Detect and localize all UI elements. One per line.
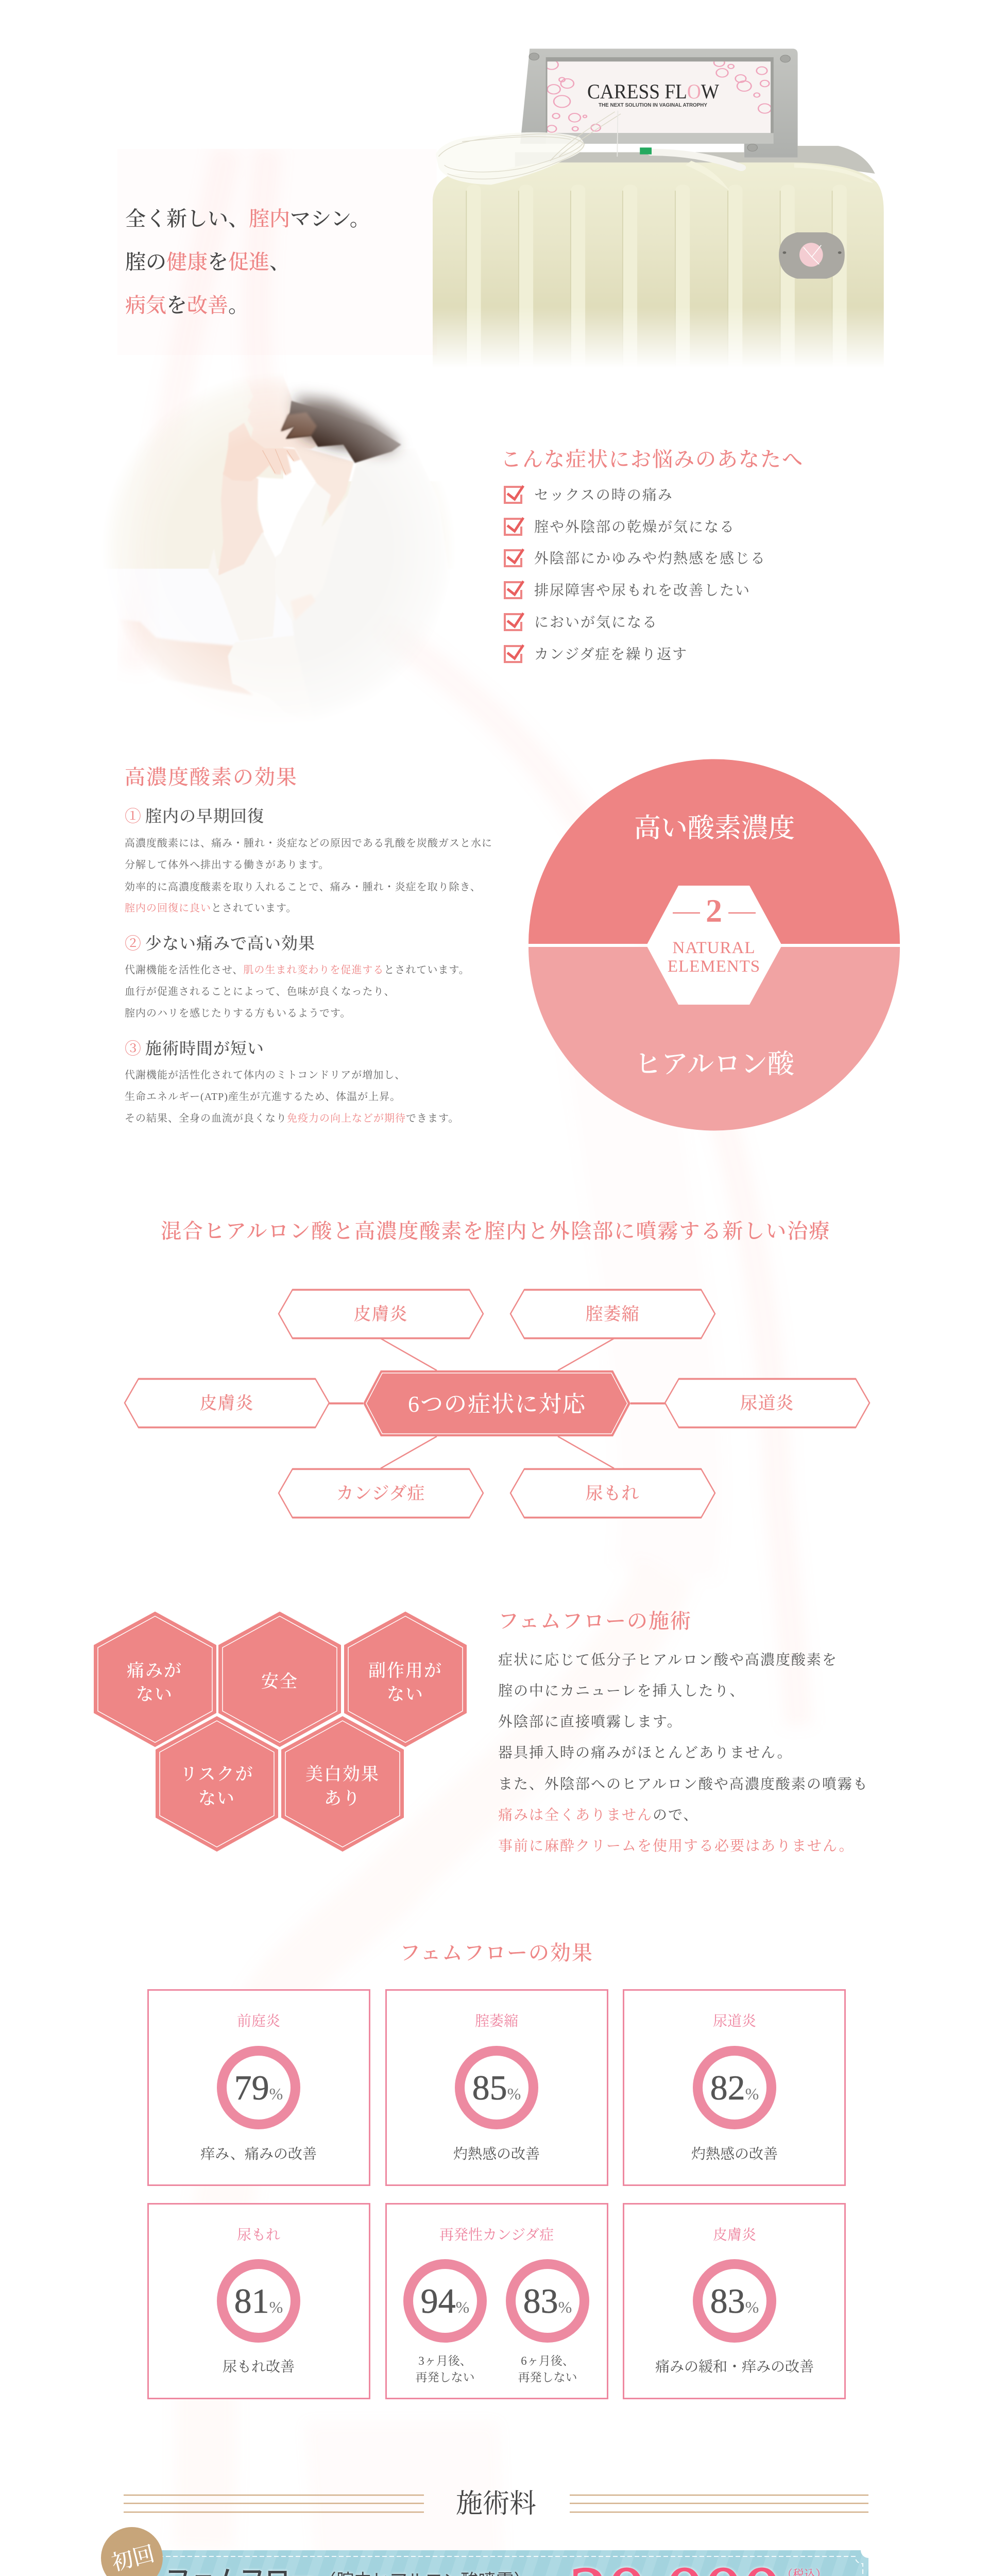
- label: hyaluronic acid: ヒアルロン酸: [635, 1050, 795, 1079]
- card: 皮膚炎: [713, 2227, 757, 2243]
- paragraph: また、外陰部へのヒアルロン酸や高濃度酸素の噴霧も: [498, 1776, 868, 1792]
- face: [246, 376, 322, 449]
- box: [279, 1469, 483, 1518]
- card: 85%: [472, 2068, 521, 2107]
- card: 痛みの緩和・痒みの改善: [655, 2359, 814, 2375]
- paragraph: 腟の中にカニューレを挿入したり、: [498, 1683, 745, 1699]
- card: 尿もれ: [237, 2227, 280, 2243]
- paragraph: 器具挿入時の痛みがほとんどありません。: [498, 1744, 793, 1761]
- card: 腟萎縮: [475, 2013, 518, 2029]
- machine body: [433, 146, 884, 376]
- hex: [344, 1612, 467, 1747]
- hex: あり: [324, 1789, 361, 1808]
- honeycomb: benefits: [94, 1612, 467, 1852]
- effect 1: 腟内の回復に良いとされています。: [125, 902, 297, 914]
- hex: 美白効果: [305, 1765, 380, 1784]
- hero copy: [125, 207, 370, 317]
- card: 79%: [234, 2068, 283, 2107]
- effect 2: 少ない痛みで高い効果: [145, 934, 315, 953]
- centre hexagon: 6つの症状に対応: [408, 1392, 587, 1417]
- card: 前庭炎: [237, 2013, 281, 2029]
- logo text: [588, 84, 719, 107]
- card: 尿もれ改善: [223, 2359, 295, 2375]
- box: 皮膚炎: [353, 1304, 408, 1324]
- heading: treatment fee: 施術料: [456, 2489, 536, 2519]
- hex: 痛みが: [127, 1661, 182, 1681]
- effect 3: 生命エネルギー(ATP)産生が亢進するため、体温が上昇。: [125, 1091, 401, 1103]
- tube coil and catheter: [436, 111, 741, 191]
- check item: セックスの時の痛み: [534, 487, 673, 503]
- hair, defined fringe: [281, 401, 401, 463]
- card: [386, 2204, 608, 2399]
- panel: femflow procedure: [498, 1609, 868, 1854]
- card: 83%: [710, 2281, 759, 2320]
- hero copy: 病気を改善。: [125, 294, 249, 317]
- arm: [217, 472, 264, 577]
- effect 2: ②: [125, 934, 141, 953]
- chart: two natural elements circle: [528, 759, 900, 1130]
- card: 3ヶ月後、: [418, 2354, 472, 2367]
- lid frame: [520, 49, 798, 158]
- hex: 安全: [261, 1672, 298, 1691]
- effect 1: 腟内の早期回復: [145, 807, 264, 825]
- first-time badge: [101, 2527, 163, 2576]
- effect 1: 分解して体外へ排出する働きがあります。: [125, 859, 329, 871]
- hex: リスクが: [180, 1765, 254, 1784]
- effect 2: [125, 934, 470, 1019]
- sleeve: [208, 532, 277, 641]
- effect 1: [125, 807, 492, 914]
- paragraph: 事前に麻酔クリームを使用する必要はありません。: [498, 1838, 855, 1854]
- card: 6ヶ月後、: [521, 2354, 574, 2367]
- card: 81%: [234, 2281, 283, 2320]
- card: [148, 1990, 370, 2185]
- panel: high-concentration oxygen effects: [125, 766, 492, 1124]
- woman photo: [114, 381, 410, 696]
- box: カンジダ症: [336, 1484, 425, 1503]
- hex: ない: [198, 1789, 235, 1808]
- box: 皮膚炎: [200, 1394, 253, 1413]
- card: 痒み、痛みの改善: [200, 2146, 317, 2162]
- natural elements: NATURAL: [673, 939, 755, 957]
- effect 2: 腟内のハリを感じたりする方もいるようです。: [125, 1007, 351, 1019]
- centre hexagon: [646, 886, 782, 1005]
- effect 3: 代謝機能が活性化されて体内のミトコンドリアが増加し、: [125, 1069, 405, 1081]
- heading: 高濃度酸素の効果: [125, 766, 298, 789]
- effect 3: ③: [125, 1039, 141, 1058]
- card: [148, 2204, 370, 2399]
- box: 尿もれ: [585, 1484, 640, 1503]
- card: [386, 1990, 608, 2185]
- effect 2: 代謝機能を活性化させ、肌の生まれ変わりを促進するとされています。: [125, 964, 470, 976]
- check item: においが気になる: [534, 614, 658, 631]
- hex: [281, 1716, 404, 1852]
- effect 1: 高濃度酸素には、痛み・腫れ・炎症などの原因である乳酸を炭酸ガスと水に: [125, 837, 492, 849]
- check item: 排尿障害や尿もれを改善したい: [534, 582, 751, 599]
- card: 82%: [710, 2068, 759, 2107]
- box: [510, 1469, 715, 1518]
- hero copy: 全く新しい、腟内マシン。: [125, 207, 370, 230]
- panel: symptoms checklist: [501, 448, 804, 663]
- machine photo: [433, 49, 884, 376]
- effect 3: 施術時間が短い: [145, 1039, 264, 1058]
- effect 2: 血行が促進されることによって、色味が良くなったり、: [125, 986, 395, 997]
- first-time badge: 初回: [109, 2542, 157, 2575]
- box: [125, 1379, 329, 1428]
- logo plate: [779, 232, 845, 279]
- centre hexagon: [363, 1370, 630, 1436]
- hand: [223, 422, 301, 481]
- card: 83%: [523, 2281, 572, 2320]
- torso: [228, 448, 450, 723]
- heading: treatment fee: [124, 2489, 868, 2519]
- background smoke: [172, 151, 277, 355]
- box: [665, 1379, 869, 1428]
- hex: ない: [136, 1685, 173, 1704]
- logo text: THE NEXT SOLUTION IN VAGINAL ATROPHY: [599, 103, 707, 108]
- card: 灼熱感の改善: [691, 2146, 778, 2162]
- logo text: CARESS FLOW: [587, 80, 719, 103]
- box: [510, 1290, 715, 1338]
- box: 腟萎縮: [585, 1304, 640, 1324]
- paragraph: [498, 1652, 868, 1854]
- effect 1: ①: [125, 807, 141, 825]
- effect 1: 効率的に高濃度酸素を取り入れることで、痛み・腫れ・炎症を取り除き、: [125, 880, 481, 893]
- label: oxygen: 高い酸素濃度: [634, 814, 795, 843]
- hex: [94, 1612, 216, 1747]
- title: new treatment: 混合ヒアルロン酸と高濃度酸素を腟内と外陰部に噴霧する新しい治療: [161, 1219, 830, 1243]
- hex: 副作用が: [368, 1661, 442, 1681]
- hero copy: 腟の健康を促進、: [125, 250, 290, 274]
- card: 再発しない: [518, 2371, 577, 2384]
- paragraph: 外陰部に直接噴霧します。: [498, 1714, 683, 1730]
- window gap: [255, 477, 318, 560]
- price ticket: [124, 2550, 868, 2576]
- box: 尿道炎: [740, 1394, 794, 1413]
- paragraph: 症状に応じて低分子ヒアルロン酸や高濃度酸素を: [498, 1652, 838, 1668]
- heading: こんな症状にお悩みのあなたへ: [501, 448, 804, 471]
- diagram: six symptoms: [125, 1290, 869, 1518]
- check item: 外陰部にかゆみや灼熱感を感じる: [534, 550, 766, 567]
- card: [623, 2204, 845, 2399]
- leg: [127, 621, 250, 694]
- card: 尿道炎: [713, 2013, 757, 2029]
- hex: [156, 1716, 278, 1852]
- natural elements line 2: ELEMENTS: [668, 957, 760, 976]
- card: 灼熱感の改善: [453, 2146, 540, 2162]
- card: [623, 1990, 845, 2185]
- heading: femflow effects: フェムフローの効果: [400, 1941, 593, 1964]
- neck and chest: [293, 445, 354, 518]
- hex: ない: [387, 1685, 424, 1704]
- connectors: [329, 1338, 665, 1468]
- hair, soft upper part: [295, 396, 401, 451]
- effect 3: その結果、全身の血流が良くなり免疫力の向上などが期待できます。: [125, 1112, 459, 1124]
- check item: 腟や外陰部の乾燥が気になる: [534, 519, 735, 535]
- box: [279, 1290, 483, 1338]
- paragraph: 痛みは全くありませんので、: [498, 1807, 698, 1823]
- hex: [218, 1612, 341, 1747]
- number 2: 2: [706, 892, 722, 929]
- heading: フェムフローの施術: [498, 1609, 692, 1633]
- card: 再発性カンジダ症: [439, 2227, 554, 2243]
- card: 再発しない: [415, 2371, 475, 2384]
- card: 94%: [421, 2281, 469, 2320]
- check item: カンジダ症を繰り返す: [534, 646, 688, 663]
- effect 3: [125, 1039, 459, 1124]
- product name: [165, 2566, 532, 2576]
